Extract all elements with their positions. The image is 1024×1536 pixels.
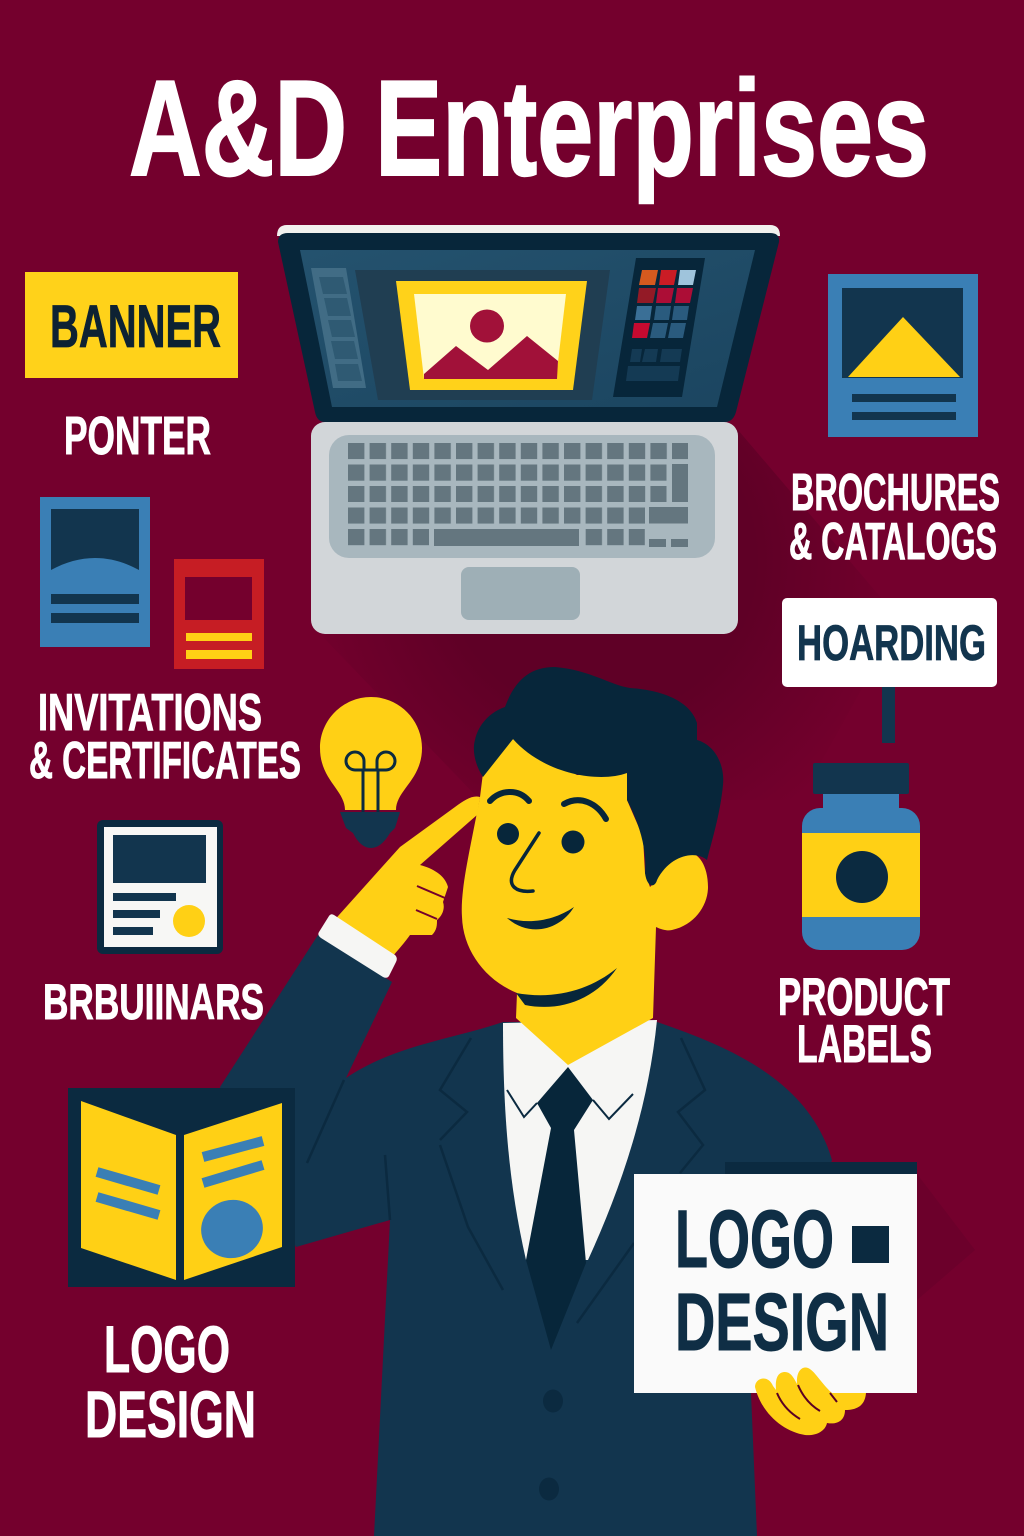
label: logo design: DESIGN — [85, 1377, 256, 1451]
label: ponter: PONTER — [64, 406, 211, 466]
icon: product bottle — [802, 763, 920, 950]
jacket buttons — [539, 1390, 563, 1500]
hoarding sign — [782, 598, 997, 743]
label: product labels: LABELS — [797, 1015, 932, 1074]
banner sign: BANNER — [50, 293, 221, 360]
person — [220, 667, 832, 1536]
hair — [474, 667, 723, 885]
icon: open booklet — [68, 1088, 295, 1287]
laptop — [277, 225, 780, 634]
suit folds and lapels — [307, 1038, 705, 1323]
colour palette panel — [613, 258, 705, 397]
laptop long shadow — [320, 430, 900, 800]
necktie — [526, 1067, 593, 1350]
label: product labels — [778, 968, 950, 1074]
laptop screen lid — [277, 225, 780, 422]
image thumbnail — [396, 281, 587, 390]
logo design card: DESIGN — [675, 1277, 889, 1368]
label: invitations and certificates: & CERTIFICATES — [29, 732, 301, 790]
facial features — [490, 792, 617, 1007]
banner sign — [25, 272, 238, 378]
icon: webinar flyer — [97, 820, 223, 954]
label: brbuiinars: BRBUIINARS — [43, 974, 264, 1030]
label: logo design: LOGO — [104, 1312, 230, 1386]
tool strip — [311, 268, 366, 388]
shirt collar lines — [507, 1090, 633, 1119]
suit jacket — [220, 935, 832, 1536]
shirt — [503, 1020, 657, 1260]
neck and face — [462, 739, 708, 1065]
shirt cuff — [318, 914, 397, 978]
label: invitations and certificates — [29, 684, 301, 790]
logo design card: LOGO — [675, 1194, 834, 1285]
holding hand — [755, 1368, 866, 1435]
label: invitations and certificates: INVITATIONS — [38, 684, 262, 742]
pointing hand — [330, 797, 480, 965]
logo design card — [634, 1162, 917, 1393]
card long shadow — [917, 1174, 975, 1300]
laptop keyboard base — [311, 422, 738, 634]
icon: invitations and certificates — [40, 497, 264, 669]
icon: brochure — [828, 274, 978, 437]
label: logo design — [85, 1312, 256, 1451]
icon: light bulb — [320, 697, 422, 848]
label: brochures and catalogs — [789, 464, 1000, 571]
